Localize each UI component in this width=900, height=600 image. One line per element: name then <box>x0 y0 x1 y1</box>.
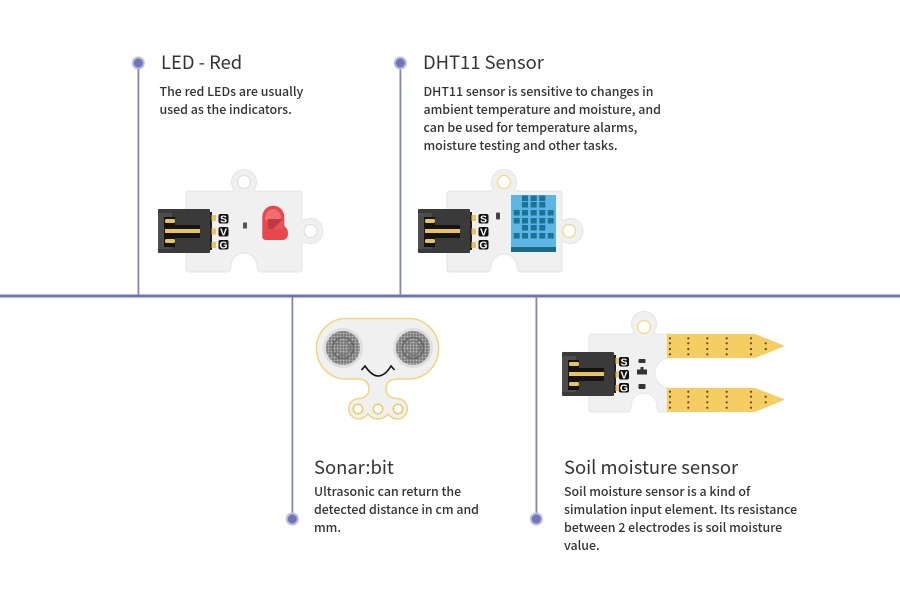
connector <box>158 209 216 253</box>
timeline stem: Soil <box>530 297 543 526</box>
description: Sonar: detected distance in cm and <box>314 500 479 518</box>
pin labels <box>478 214 488 252</box>
description: LED: The red LEDs are usually <box>160 82 304 100</box>
board <box>447 170 583 272</box>
panel: DHT11 text <box>423 49 661 154</box>
description: LED <box>160 82 304 118</box>
heading: Soil moisture sensor: Soil moisture sensor <box>564 454 739 480</box>
DHT11 chip <box>511 195 556 252</box>
description: DHT11: ambient temperature and moisture, and <box>424 100 661 118</box>
timeline stem: LED <box>132 56 145 295</box>
smile <box>362 366 394 376</box>
mounting holes <box>498 176 576 238</box>
description: Soil: Soil moisture sensor is a kind of <box>564 482 751 500</box>
description: LED: used as the indicators. <box>160 100 292 118</box>
right ultrasonic transducer <box>393 328 433 368</box>
pin labels: G <box>479 240 488 252</box>
pin labels: V <box>620 370 628 382</box>
description: Soil: between 2 electrodes is soil moisture <box>564 518 782 536</box>
pin labels: G <box>620 383 628 395</box>
pin labels: G <box>219 240 228 252</box>
description: Soil: simulation input element. Its resistance <box>564 500 797 518</box>
heading: LED - Red: LED - Red <box>161 49 242 75</box>
bottom electrode <box>667 388 785 412</box>
pin labels <box>218 214 228 252</box>
description: Soil <box>564 482 797 554</box>
mounting holes <box>238 176 317 238</box>
timeline stem: Sonar <box>286 297 299 526</box>
pin labels <box>619 357 629 395</box>
description: DHT11: DHT11 sensor is sensitive to changes in <box>424 82 653 100</box>
illustration: Soil moisture module <box>562 311 785 412</box>
panel: Soil text <box>564 454 797 554</box>
resistor <box>243 222 247 228</box>
illustration: DHT11 module <box>418 170 583 272</box>
pin labels: V <box>220 227 227 239</box>
top electrode <box>667 334 785 358</box>
mounting hole <box>638 320 650 334</box>
description: Soil: value. <box>564 536 600 554</box>
red LED <box>262 206 288 240</box>
pin labels: S <box>480 214 487 226</box>
heading: Sonar:bit: Sonar:bit <box>314 454 394 480</box>
resistor <box>496 212 500 220</box>
connector <box>562 352 620 396</box>
left ultrasonic transducer <box>323 328 363 368</box>
electrode vias <box>669 337 767 409</box>
panel: Sonar text <box>314 454 479 536</box>
surface-mount components <box>637 359 647 389</box>
description: DHT11 <box>424 82 661 154</box>
description: Sonar <box>314 482 479 536</box>
board <box>589 311 670 412</box>
panel: LED text <box>160 49 304 118</box>
base holes <box>353 404 403 414</box>
description: DHT11: can be used for temperature alarms, <box>424 118 637 136</box>
illustration: LED module <box>158 170 323 272</box>
description: Sonar: mm. <box>314 518 341 536</box>
illustration: Sonar:bit <box>316 318 439 419</box>
description: Sonar: Ultrasonic can return the <box>314 482 461 500</box>
heading: DHT11 Sensor: DHT11 Sensor <box>423 49 545 75</box>
pin labels: S <box>220 214 227 226</box>
connector <box>418 209 476 253</box>
timeline axis <box>0 294 900 298</box>
pin labels: S <box>620 357 628 369</box>
pin labels: V <box>480 227 487 239</box>
board outline <box>316 318 439 419</box>
board <box>186 170 323 272</box>
timeline stem: DHT11 <box>394 56 407 295</box>
description: DHT11: moisture testing and other tasks. <box>424 136 618 154</box>
